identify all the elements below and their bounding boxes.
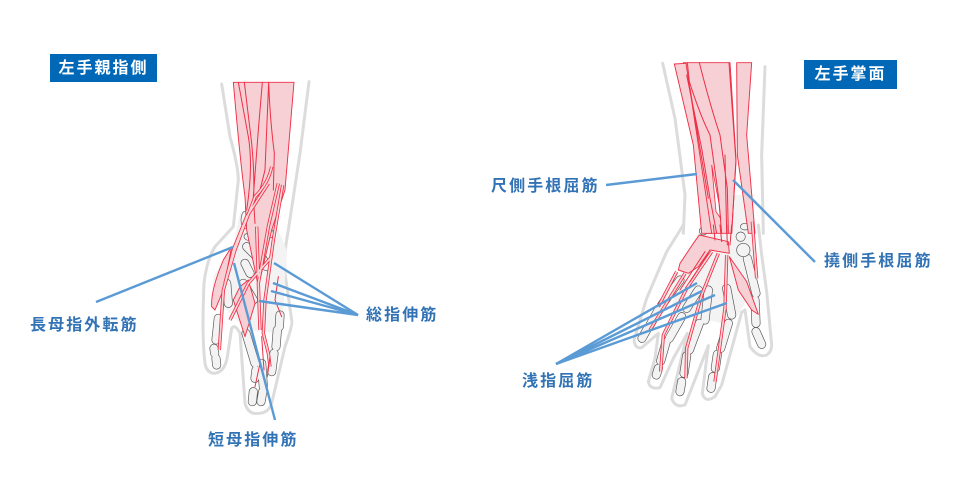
bones (214, 211, 280, 402)
leader lines: right hand (556, 174, 815, 364)
palm fill (212, 210, 287, 333)
label: flexor carpi radialis: 撓側手根屈筋 (824, 253, 933, 270)
skin outline (663, 63, 685, 233)
heading badge: thumb side (50, 54, 157, 82)
label: flexor carpi ulnaris: 尺側手根屈筋 (491, 178, 600, 195)
label: extensor pollicis brevis: 短母指伸筋 (208, 432, 299, 449)
label: extensor digitorum: 総指伸筋 (366, 307, 438, 324)
illustration: left hand palm side (634, 63, 772, 406)
short thumb extensor muscle (233, 280, 255, 337)
flexor carpi radialis muscle to thumb (729, 257, 758, 314)
illustration: left hand thumb side (203, 82, 309, 414)
leader lines: left hand (96, 247, 358, 420)
forearm muscles (233, 82, 294, 287)
transverse carpal ligament (678, 235, 729, 273)
abductor pollicis longus muscle (212, 247, 232, 310)
tendons (650, 222, 757, 382)
bones (642, 223, 762, 392)
heading badge: thumb side: 左手親指側 (58, 60, 148, 77)
label: flexor digitorum superficialis: 浅指屈筋 (522, 373, 594, 390)
label: abductor pollicis longus: 長母指外転筋 (30, 317, 139, 334)
heading badge: palm side: 左手掌面 (814, 66, 886, 83)
skin outline (203, 82, 309, 414)
palm and wrist fill (670, 195, 757, 325)
forearm muscles (674, 63, 755, 233)
heading badge: palm side (804, 60, 897, 89)
tendons (219, 167, 283, 387)
tendon gap inside muscle belly (712, 165, 721, 218)
